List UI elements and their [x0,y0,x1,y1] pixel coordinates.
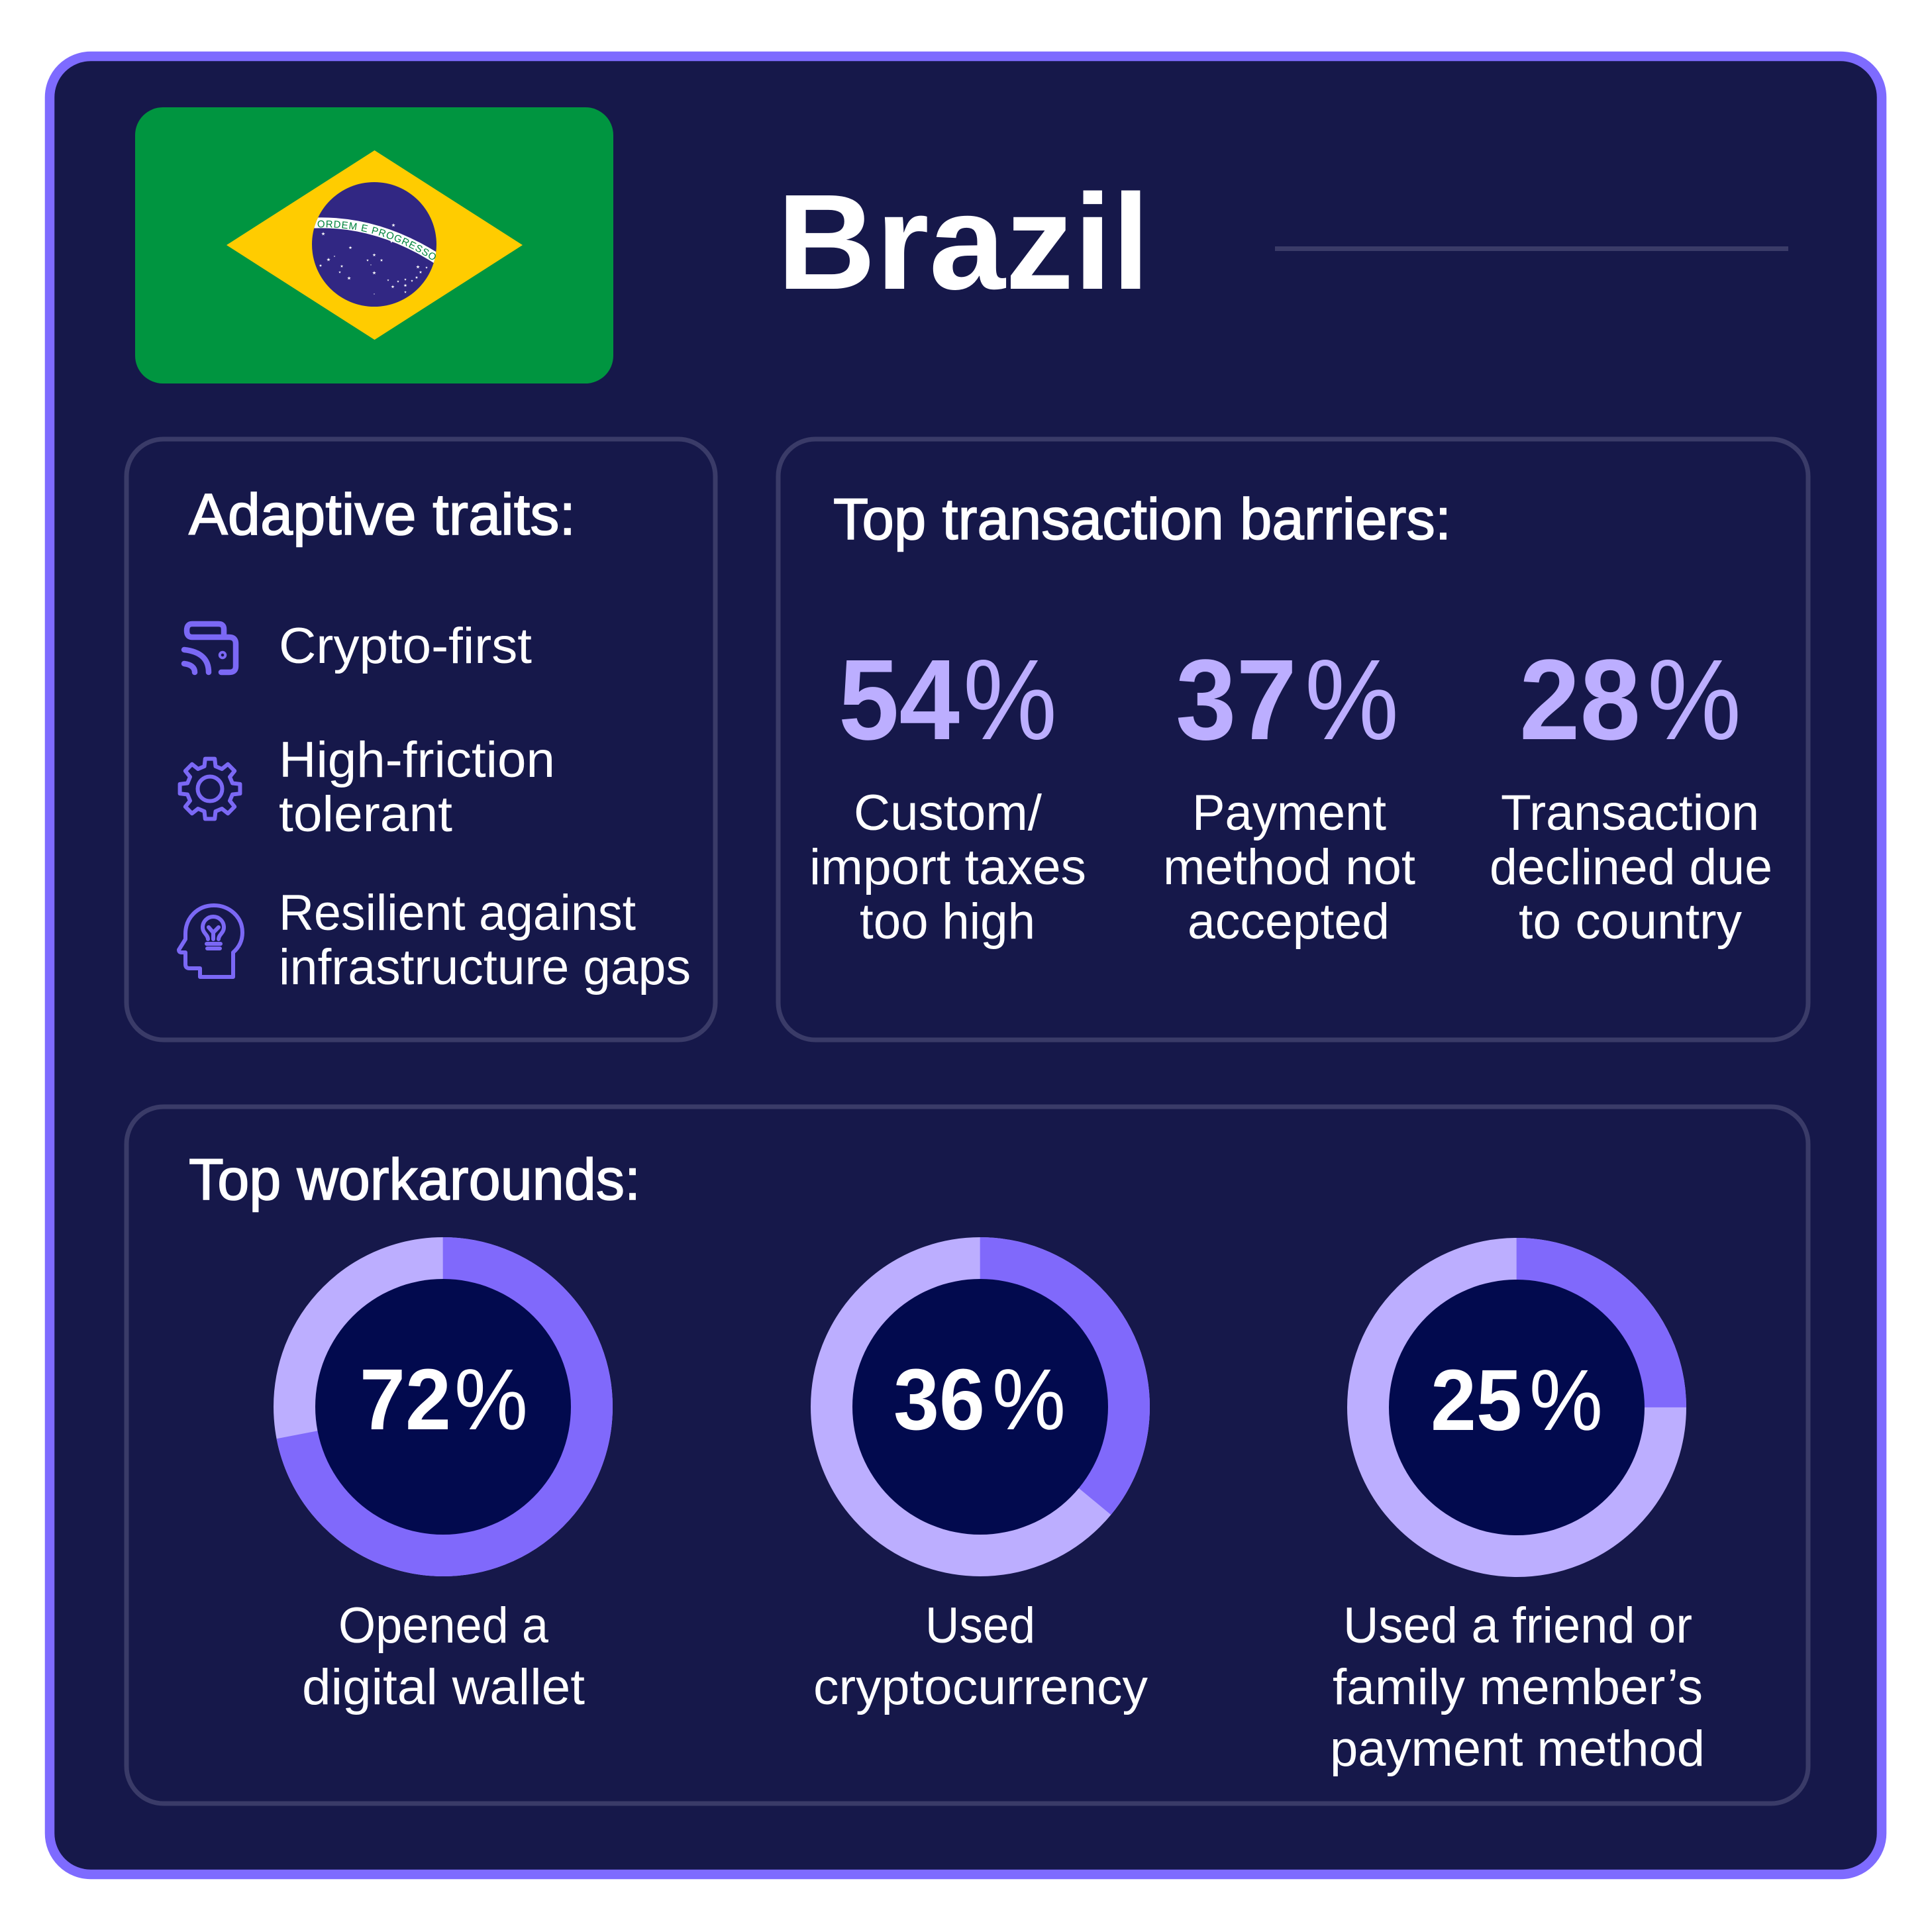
donut: 25% used a friend or family member's payment method: family member’s [1333,1659,1703,1715]
trait: resilient against infrastructure gaps: infrastructure gaps [279,939,691,995]
donut: 25% used a friend or family member's payment method: 25 [1431,1351,1522,1449]
flag of Brazil: ORDEM E PROGRESSO [318,220,436,260]
stat: 28% transaction declined due to country: to country [1519,893,1742,950]
donut: 25% used a friend or family member's payment method: Used a friend or [1343,1598,1692,1654]
icon: head with light bulb [179,905,242,977]
stat: 37% payment method not accepted: method not [1163,839,1415,895]
panel: top workarounds [127,1107,1808,1804]
panel: adaptive traits [127,439,715,1040]
stat: 28% transaction declined due to country: % [1647,635,1741,764]
stat: 37% payment method not accepted: Payment [1192,785,1386,841]
icon: crypto wallet [184,624,236,672]
donut: 36% used cryptocurrency: cryptocurrency [813,1659,1148,1715]
donut: 25% used a friend or family member's payment method: % [1529,1351,1603,1449]
donut: 36% used cryptocurrency: 36 [893,1350,985,1448]
donut: 25% used a friend or family member's payment method [1330,1259,1705,1777]
stat: 37% payment method not accepted: % [1305,635,1399,764]
stat: 54% custom/import taxes too high: 54 [839,635,960,764]
donut: 36% used cryptocurrency: Used [925,1598,1035,1654]
stat: 54% custom/import taxes too high: import taxes [809,839,1086,895]
trait: resilient against infrastructure gaps: Resilient against [279,885,636,941]
donut: 72% opened a digital wallet: 72 [360,1350,451,1448]
stat: 28% transaction declined due to country: 28 [1519,635,1641,764]
stat: 54% custom/import taxes too high: too high [860,893,1035,950]
donut: 72% opened a digital wallet: % [454,1350,528,1448]
trait: high-friction tolerant: High-friction [279,732,555,788]
trait: resilient against infrastructure gaps [279,885,691,995]
heading: adaptive traits: Adaptive traits: [189,482,576,547]
donut: 36% used cryptocurrency [813,1258,1148,1715]
flag of Brazil [135,107,613,383]
donut: 72% opened a digital wallet: digital wallet [302,1659,585,1715]
stat: 28% transaction declined due to country: declined due [1490,839,1772,895]
stat: 28% transaction declined due to country [1490,635,1772,950]
heading: top workarounds: Top workarounds: [189,1146,640,1212]
icon: gear [180,759,240,819]
trait: high-friction tolerant: tolerant [279,786,452,842]
stat: 37% payment method not accepted [1163,635,1415,950]
stat: 37% payment method not accepted: 37 [1176,635,1297,764]
donut: 36% used cryptocurrency: % [992,1350,1066,1448]
stat: 54% custom/import taxes too high: % [963,635,1057,764]
panel: top transaction barriers [778,439,1808,1040]
stat: 37% payment method not accepted: accepted [1188,893,1390,950]
stat: 54% custom/import taxes too high: Custom/ [854,785,1042,841]
donut: 72% opened a digital wallet: Opened a [338,1598,549,1654]
trait: high-friction tolerant [279,732,555,842]
stat: 54% custom/import taxes too high [809,635,1086,950]
stat: 28% transaction declined due to country: Transaction [1501,785,1759,841]
heading: top transaction barriers: Top transaction barriers: [833,486,1451,552]
donut: 25% used a friend or family member's payment method: payment method [1330,1721,1705,1777]
donut: 72% opened a digital wallet [295,1258,591,1715]
title: Brazil: Brazil [777,166,1150,318]
trait: crypto-first: Crypto-first [279,618,532,674]
